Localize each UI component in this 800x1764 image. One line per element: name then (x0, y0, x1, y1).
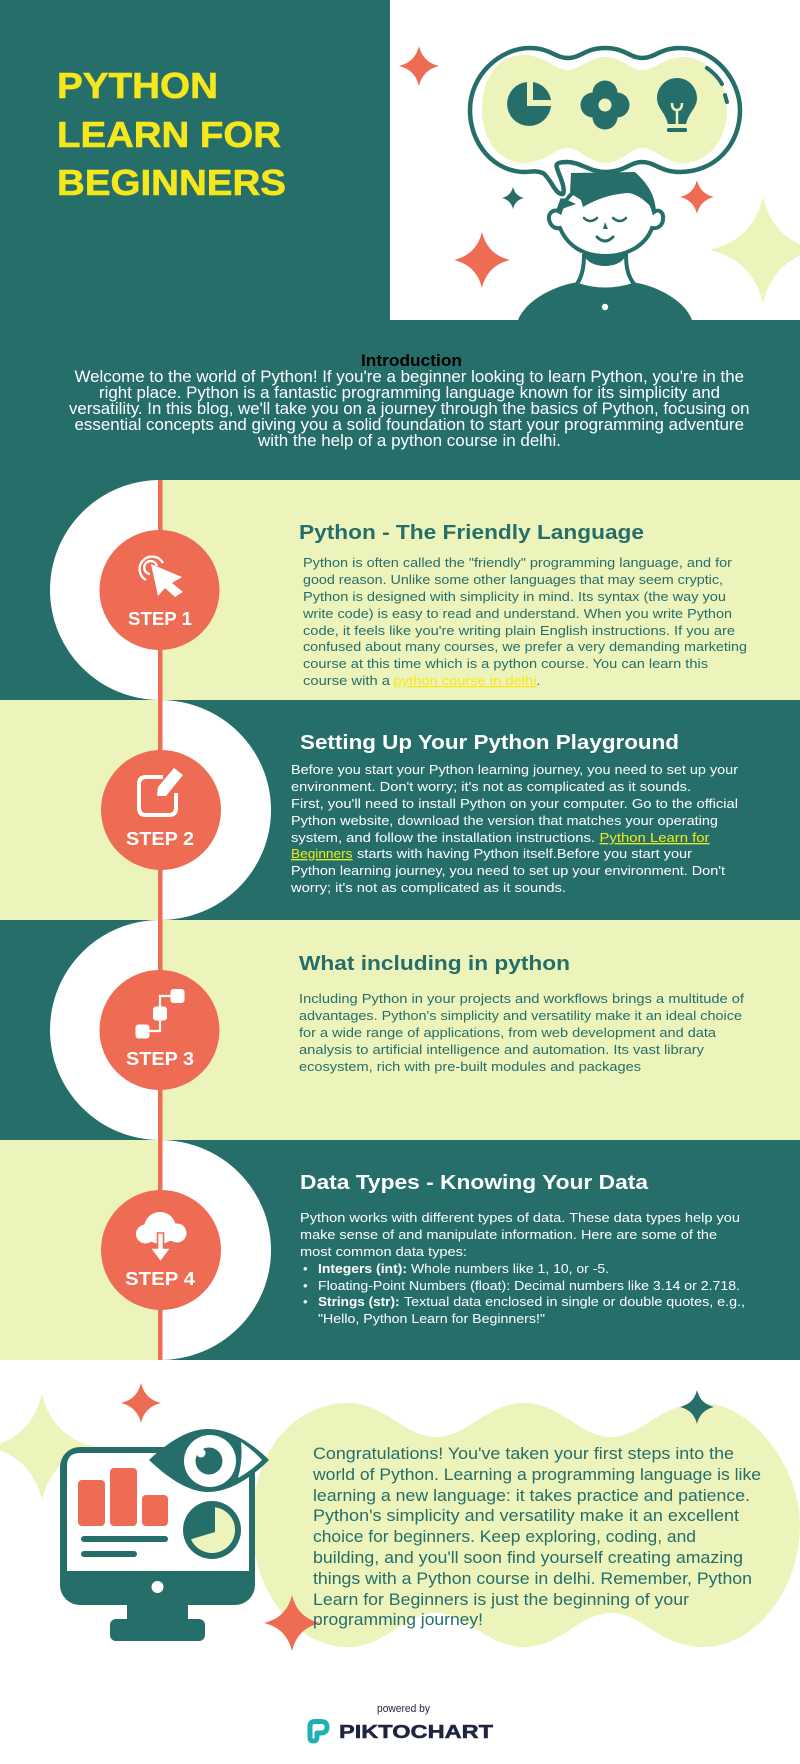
panel: step 2 (0, 700, 800, 920)
step 3 badge (100, 970, 220, 1090)
step 1 text: good reason. Unlike some other languages that may seem cryptic, (303, 572, 723, 587)
panel: step 1 (0, 480, 800, 700)
introduction text: with the help of a python course in delhi. (257, 431, 561, 450)
step 2 text: Beginners (291, 846, 353, 861)
step 4 text: make sense of and manipulate information. Here are some of the (300, 1227, 717, 1242)
introduction text: Introduction (361, 351, 462, 370)
step 4 text: most common data types: (300, 1244, 467, 1259)
step 4 heading: Data Types - Knowing Your Data (300, 1172, 649, 1194)
step 4 text: Python works with different types of data. These data types help you (300, 1210, 740, 1225)
panel: step 4 (0, 1140, 800, 1360)
step 1 badge: STEP 1 (128, 609, 192, 629)
step 1 badge (100, 530, 220, 650)
step 4 text: "Hello, Python Learn for Beginners!" (318, 1311, 545, 1326)
step 2 text: Before you start your Python learning journey, you need to set up your (291, 762, 739, 777)
step 1 text: write code) is easy to read and understand. When you write Python (302, 606, 732, 621)
step 1 text: course with a (303, 673, 391, 688)
step 3 text: analysis to artificial intelligence and automation. Its vast library (299, 1042, 704, 1057)
conclusion text: Learn for Beginners is just the beginning of your (313, 1591, 690, 1609)
step 1 text: Python is often called the "friendly" programming language, and for (303, 555, 733, 570)
step 1 text (302, 555, 747, 688)
introduction text (69, 351, 750, 450)
step 4 text: Whole numbers like 1, 10, or -5. (411, 1261, 609, 1276)
panel: header (0, 0, 800, 480)
step 4 text: Strings (str): (318, 1294, 400, 1309)
step 4 badge (101, 1190, 221, 1310)
step 1 text: python course in delhi (394, 673, 537, 688)
illustration: monitor with eye (60, 1429, 269, 1641)
step 4 text: • (303, 1294, 308, 1309)
step 4 text: Floating-Point Numbers (float): Decimal numbers like 3.14 or 2.718. (318, 1278, 740, 1293)
introduction text: right place. Python is a fantastic programming language known for its simplicity and (99, 383, 720, 402)
step 1 text: confused about many courses, we prefer a very demanding marketing (303, 639, 747, 654)
step 4 text: • (303, 1278, 308, 1293)
step 2 text: First, you'll need to install Python on your computer. Go to the official (291, 796, 738, 811)
illustration: thinking person (390, 0, 800, 320)
introduction text: essential concepts and giving you a solid foundation to start your programming adventure (74, 415, 744, 434)
step 2 text: system, and follow the installation instructions. (291, 830, 595, 845)
step 2 badge (101, 750, 221, 870)
step 2 text: starts with having Python itself.Before you start your (357, 846, 693, 861)
step 2 text: Python website, download the version that matches your operating (291, 813, 718, 828)
step 2 text: Python learning journey, you need to set up your environment. Don't (291, 863, 725, 878)
step 2 badge: STEP 2 (126, 829, 194, 849)
conclusion text: world of Python. Learning a programming language is like (312, 1466, 761, 1484)
step 3 heading: What including in python (299, 953, 570, 975)
step 1 text: code, it feels like you're writing plain English instructions. If you are (303, 623, 735, 638)
step 2 text: worry; it's not as complicated as it sounds. (290, 880, 566, 895)
title: PYTHON (57, 65, 218, 106)
conclusion text: programming journey! (313, 1611, 483, 1629)
step 2 heading: Setting Up Your Python Playground (300, 732, 679, 754)
step 3 text (299, 991, 744, 1074)
conclusion text: building, and you'll soon find yourself creating amazing (313, 1549, 743, 1567)
step 4 badge: STEP 4 (125, 1269, 195, 1289)
blob background (252, 1403, 800, 1647)
step 4 text (300, 1210, 745, 1326)
title: BEGINNERS (57, 162, 286, 203)
footer: piktochart logo: PIKTOCHART (339, 1722, 493, 1742)
conclusion text: choice for beginners. Keep exploring, coding, and (313, 1528, 696, 1546)
step 4 text: Textual data enclosed in single or double quotes, e.g., (404, 1294, 745, 1309)
conclusion text: learning a new language: it takes practice and patience. (313, 1487, 750, 1505)
footer: piktochart logo (310, 1703, 493, 1742)
step 3 badge: STEP 3 (126, 1049, 194, 1069)
conclusion text: things with a Python course in delhi. Remember, Python (313, 1570, 752, 1588)
step 2 text (290, 762, 739, 895)
step 1 text: course at this time which is a python course. You can learn this (303, 656, 708, 671)
step 3 text: ecosystem, rich with pre-built modules and packages (299, 1059, 641, 1074)
conclusion text: Congratulations! You've taken your first steps into the (313, 1445, 734, 1463)
panel: conclusion (0, 1383, 800, 1651)
step 4 text: Integers (int): (318, 1261, 407, 1276)
title: LEARN FOR (57, 114, 281, 155)
step 1 text: Python is designed with simplicity in mind. Its syntax (the way you (303, 589, 726, 604)
footer: piktochart logo: powered by (377, 1703, 430, 1715)
stars (0, 1383, 714, 1651)
step 3 text: for a wide range of applications, from web development and data (299, 1025, 717, 1040)
conclusion text (312, 1445, 761, 1629)
title (57, 65, 286, 203)
step 1 heading: Python - The Friendly Language (299, 522, 644, 544)
step 2 text: Python Learn for (600, 830, 710, 845)
introduction text: versatility. In this blog, we'll take you on a journey through the basics of Python, focusing on (69, 399, 750, 418)
step 4 text: • (303, 1261, 308, 1276)
step 3 text: Including Python in your projects and workflows brings a multitude of (299, 991, 744, 1006)
conclusion text: Python's simplicity and versatility make it an excellent (313, 1507, 739, 1525)
step 1 text: . (536, 673, 540, 688)
panel: step 3 (0, 920, 800, 1140)
step 2 text: environment. Don't worry; it's not as complicated as it sounds. (291, 779, 691, 794)
step 3 text: advantages. Python's simplicity and versatility make it an ideal choice (299, 1008, 742, 1023)
introduction text: Welcome to the world of Python! If you're a beginner looking to learn Python, you're in the (74, 367, 744, 386)
